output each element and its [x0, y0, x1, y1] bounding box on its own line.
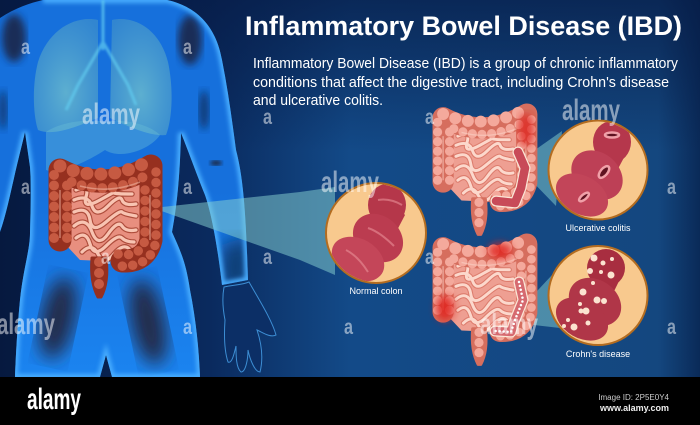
watermarks: a — [425, 246, 434, 269]
watermarks: a — [667, 176, 676, 199]
watermarks: a — [21, 176, 30, 199]
description text: conditions that affect the digestive tract, including Crohn's disease — [253, 75, 669, 91]
lesions — [562, 254, 614, 330]
watermarks: a — [425, 106, 434, 129]
watermarks: a — [183, 176, 192, 199]
intestines in body — [54, 160, 156, 297]
human body — [0, 0, 276, 378]
diseased segment — [496, 152, 525, 203]
Crohn's disease intestine — [436, 238, 531, 365]
footer bar — [0, 377, 700, 425]
label: Crohn's disease: Crohn's disease — [566, 349, 630, 359]
website: www.alamy.com — [599, 403, 669, 413]
inflamed area — [518, 113, 534, 147]
inflamed areas — [436, 243, 512, 321]
description text — [253, 56, 679, 109]
circle: ulcerative colitis — [548, 120, 648, 225]
watermarks: alamy — [562, 94, 620, 127]
pointer beam: Crohn's disease — [525, 275, 560, 328]
trachea and bronchi — [66, 0, 136, 110]
lungs — [34, 0, 172, 171]
watermarks: alamy — [82, 98, 140, 131]
watermarks: a — [344, 316, 353, 339]
watermarks: a — [21, 36, 30, 59]
circle: Crohn's disease — [548, 246, 648, 349]
description text: Inflammatory Bowel Disease (IBD) is a group of chronic inflammatory — [253, 56, 679, 72]
watermarks: a — [101, 246, 110, 269]
watermarks: a — [183, 36, 192, 59]
ulcerative colitis intestine — [438, 108, 534, 235]
watermarks: a — [263, 106, 272, 129]
diseased segment — [495, 282, 523, 332]
title: Inflammatory Bowel Disease (IBD) — [245, 11, 682, 41]
watermarks — [0, 36, 676, 341]
pointer beam: normal colon — [153, 187, 335, 275]
description text: and ulcerative colitis. — [253, 93, 383, 109]
label: ulcerative colitis: Ulcerative colitis — [565, 223, 631, 233]
watermarks: a — [183, 316, 192, 339]
watermarks: alamy — [321, 166, 379, 199]
icon: hand — [223, 282, 276, 372]
ulcers — [578, 132, 619, 203]
watermarks: a — [263, 246, 272, 269]
image id: Image ID: 2P5E0Y4 — [598, 393, 670, 402]
footer logo: alamy — [27, 383, 81, 416]
label: normal colon: Normal colon — [349, 286, 403, 296]
pointer beam: ulcerative colitis — [525, 131, 562, 206]
watermarks: alamy — [480, 308, 538, 341]
watermarks: a — [667, 316, 676, 339]
circle: normal colon — [324, 183, 426, 290]
